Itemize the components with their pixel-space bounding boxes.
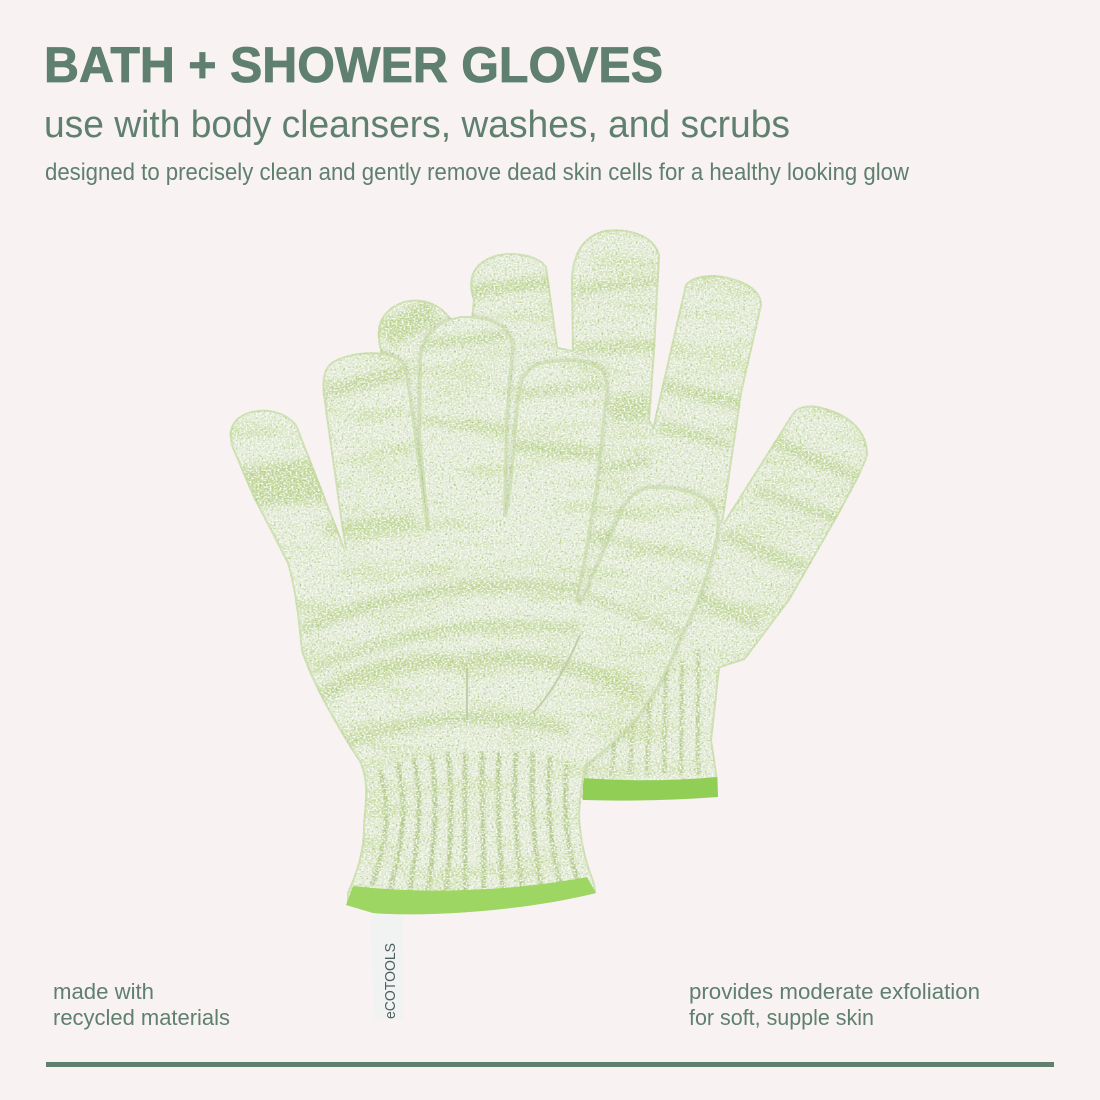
description: designed to precisely clean and gently remove dead skin cells for a healthy looking glow bbox=[45, 159, 910, 186]
tag: ecotools: eCOTOOLS bbox=[382, 943, 399, 1019]
left feature text bbox=[53, 979, 230, 1030]
front glove bbox=[220, 310, 730, 920]
right feature text: provides moderate exfoliation bbox=[689, 979, 980, 1004]
right feature text bbox=[689, 979, 980, 1030]
back glove bbox=[378, 229, 868, 800]
back glove rim tint bbox=[378, 229, 868, 800]
left feature text: recycled materials bbox=[53, 1005, 230, 1030]
shadow of front glove on back glove bbox=[380, 314, 722, 800]
tag: ecotools bbox=[370, 914, 404, 1020]
illustration: pair of gloves bbox=[220, 220, 880, 920]
left feature text: made with bbox=[53, 979, 154, 1004]
back glove hem bbox=[583, 777, 718, 801]
right feature text: for soft, supple skin bbox=[689, 1005, 874, 1030]
subtitle: use with body cleansers, washes, and scrubs bbox=[44, 104, 790, 146]
thumb crease bbox=[467, 635, 580, 720]
front glove hem bbox=[346, 877, 596, 914]
title: BATH + SHOWER GLOVES bbox=[44, 37, 663, 93]
bottom rule bbox=[46, 1062, 1054, 1067]
front glove rim tint bbox=[230, 316, 718, 914]
